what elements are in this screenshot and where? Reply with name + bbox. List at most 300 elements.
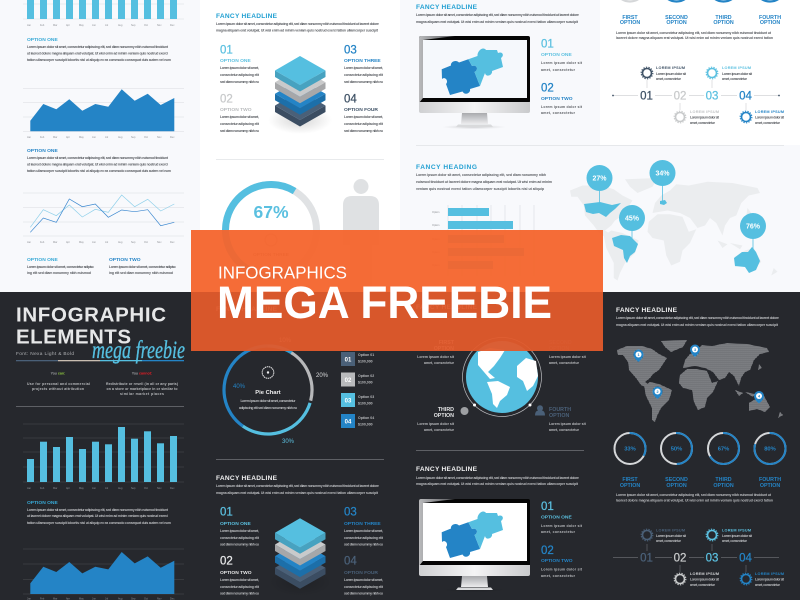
list item 01 [220,506,260,546]
list item 04: sed diam nonummy nibh eu [344,592,383,596]
banner: orange overlay [191,230,603,351]
horizontal bar chart: Option [432,238,440,241]
icon: person [343,179,379,292]
text block: you can [27,372,90,391]
text block: circles description: Lorem ipsum dolor sit amet, consectetur adipiscing elit, sed diam nonummy nibh euismod tincidunt ut [616,31,772,35]
area chart: light: Jun [92,136,97,139]
heading: behind banner: FANCY HEADLINE [416,304,478,311]
text block: you cannot [106,372,178,396]
text block: line chart legend [27,257,176,275]
list item 03: sed diam nonummy nibh eu [344,80,383,84]
legend: 01: $100,000 [358,360,373,364]
text block: you cannot: similar market places [120,392,164,396]
text block: option one: OPTION ONE [27,37,58,43]
timeline: 01 to 04: Lorem ipsum dolor sit [755,116,785,120]
list item 04: Lorem ipsum dolor sit amet, [344,578,383,582]
bubble 27%: 27% [592,176,607,182]
bubble 45%: 45% [625,216,640,222]
icon: pie centre [262,367,274,378]
bar chart: dark: Sep [131,487,136,490]
legend: 03: Option 03 [358,395,374,399]
text block: rings description [616,493,773,502]
timeline: 01 to 04 dark: 02 [674,552,686,564]
bubble 76% [740,213,766,239]
panel: globe dark [416,304,587,432]
timeline: 01 to 04 dark: amet, consectetur [755,583,781,587]
area chart: light: Apr [66,136,70,139]
legend: 04: Option 04 [358,416,374,420]
text block: intro: magna aliquam erat volutpat. Ut wisi enim ad minim veniam quis nostrud exerci tation ullamcorper suscipit [216,28,379,32]
timeline: 01 to 04 dark: 04 [739,552,752,564]
horizontal bar chart [432,205,534,276]
text block: rings description: Lorem ipsum dolor sit amet, consectetur adipiscing elit, sed diam nonummy nibh euismod tincidunt ut [616,493,772,497]
bar chart: dark: May [79,487,84,490]
label: fourth option: amet, consectetur [549,428,580,432]
text block: pie chart: adipiscing elit sed diam nonummy nibh eu [239,406,297,410]
panel: dotted map and timeline dark [613,307,786,587]
text block: intro: Lorem ipsum dolor sit amet, consectetur adipiscing elit, sed diam nonummy nibh euismod tincidunt ut laoreet dolore [416,476,579,480]
bar chart: dark: Dec [170,487,175,490]
panel: dark charts column [23,424,184,600]
bar chart: dark: Aug [118,487,123,490]
panel: timeline light [612,0,786,125]
heading: fancy headline: FANCY HEADLINE [216,13,278,20]
list item 01: OPTION ONE [220,58,251,64]
text block: you can: projects without attribution [32,387,84,391]
icon: globe [462,338,542,416]
list item 04: 04 [344,94,357,106]
list item 04 [344,94,384,133]
list item 01: 01 [220,44,233,56]
label: first option: FIRST [439,340,455,346]
area chart: light: Dec [170,136,175,139]
label: first option: Lorem ipsum dolor sit [417,355,455,359]
legend: 04 [341,414,374,428]
legend: 03: 03 [345,398,352,404]
list item 01: OPTION ONE [541,514,572,520]
timeline: 01 to 04 dark: Lorem ipsum dolor sit [755,578,785,582]
timeline: 01 to 04 dark: Lorem ipsum dolor sit [722,534,753,538]
text block: circles description: laoreet dolore magna aliquam erat volutpat. Ut wisi enim ad minim veniam quis nostrud exerci tation [616,36,773,40]
timeline: 01 to 04: 02 [674,90,686,102]
list item 03: OPTION THREE [344,521,381,527]
bar chart: dark: Apr [66,487,70,490]
text block: you cannot: on a store or marketplace in or similar to [106,387,178,391]
line chart: two series: Sep [131,241,136,244]
line chart: two series [23,193,184,244]
legend: 01 [341,352,374,366]
icon: stacked layers [268,56,332,134]
pie labels: 10% [279,338,292,344]
labels: four options: SECOND [665,477,688,483]
timeline: 01 to 04 dark: amet, consectetur [690,583,716,587]
timeline: 01 to 04 [612,66,785,125]
label: second option: OPTION [549,346,569,352]
list item 04 [344,556,384,596]
timeline: 01 to 04 dark: amet, consectetur [656,539,682,543]
subtitle: font note: Font: Nexa Light & Bold [16,351,74,357]
text block: intro: magna aliquam erat volutpat. Ut wisi enim ad minim veniam quis nostrud exerci tation ullamcorper suscipit [416,482,579,486]
list item 03: OPTION THREE [344,58,381,64]
labels: four options: OPTION [713,483,734,489]
list item 02: 02 [220,556,233,568]
pie ring [207,329,329,451]
bubble 34% [650,160,676,186]
list item 01: Lorem ipsum dolor sit amet, [220,66,259,70]
script: mega freebie: mega freebie [92,337,185,364]
label: third option: Lorem ipsum dolor sit [417,422,455,426]
text block: intro [416,173,552,191]
label: fourth option: Lorem ipsum dolor sit [549,422,587,426]
list item 01: Lorem ipsum dolor sit [541,61,583,65]
text block: intro: Lorem ipsum dolor sit amet, consectetur adipiscing elit, sed diam nonummy nibh euismod tincidunt ut laoreet dolore [216,484,379,488]
text block: option one blue [27,148,171,173]
text block: intro [216,484,379,495]
label: fourth option: OPTION [549,413,569,419]
labels: four options: THIRD [715,477,732,483]
label: third option: amet, consectetur [424,428,455,432]
bar chart: cropped light: Feb [40,24,45,27]
panel: stacked layers dark [216,475,384,596]
text block: option one dark: OPTION ONE [27,500,58,506]
list item 01 [220,44,260,84]
text block: option one: tation ullamcorper suscipit lobortis nisl ut aliquip ex ea commodo consequat duis autem vel eum [27,58,171,62]
label: second option: SECOND [549,340,572,346]
horizontal bar chart: Option [432,264,440,267]
list item 02: consectetur adipiscing elit [220,122,260,126]
list item 02: OPTION TWO [541,558,573,564]
timeline: 01 to 04: Lorem ipsum dolor sit [656,72,687,76]
list item 02: OPTION TWO [220,570,252,576]
bar chart: dark: Jul [105,487,109,490]
text block: line chart legend: ing elit sed diam nonummy nibh euismod [27,271,91,275]
list item 01: amet, consectetur [541,530,576,534]
list item 02: amet, consectetur [541,111,576,115]
list item 01: Lorem ipsum dolor sit [541,524,583,528]
list item 02: Lorem ipsum dolor sit [541,105,583,109]
line chart: two series: May [79,241,84,244]
progress ring 50%: 50% [671,446,682,452]
text block: pie chart: Lorem ipsum dolor sit amet, consectetur [240,399,296,403]
line chart: two series: Aug [118,241,123,244]
labels: four options: SECOND [665,15,688,21]
area chart: light: Mar [53,136,57,139]
labels: four options: OPTION [666,483,687,489]
bar chart: cropped light: Jun [92,24,97,27]
list item 03 [344,44,384,84]
legend: 01: Option 01 [358,353,374,357]
line chart: two series: Oct [144,241,148,244]
map pin 2 [652,386,662,399]
text block: intro: Lorem ipsum dolor sit amet, consectetur adipiscing elit, sed diam nonummy nibh euismod tincidunt ut laoreet dolore [416,13,579,17]
text block: intro: magna aliquam erat volutpat. Ut wisi enim ad minim veniam quis nostrud exerci tation ullamcorper suscipit [216,491,379,495]
heading: fancy headline: FANCY HEADLINE [416,4,478,11]
labels: four options: OPTION [620,483,640,489]
text block: intro: Lorem ipsum dolor sit amet, consectetur adipiscing elit, sed diam nonummy nibh euismod tincidunt ut laoreet dolore [216,22,379,26]
bar chart: dark: Oct [144,487,148,490]
bar chart: dark [23,424,184,490]
list item 04: sed diam nonummy nibh eu [344,129,383,133]
text block: you can: You can: [51,372,65,376]
progress ring 50% [661,433,692,464]
area chart: dark [23,549,184,600]
bubble 45% [619,205,645,231]
list item 01: amet, consectetur [541,68,576,72]
horizontal bar chart: Option [432,211,440,214]
icon: stacked layers dark [268,518,332,596]
title: infographic elements: INFOGRAPHIC [16,304,166,326]
timeline: 01 to 04 dark: LOREM IPSUM [690,572,719,576]
list item 01: 01 [541,38,554,50]
timeline: 01 to 04 dark: Lorem ipsum dolor sit [690,578,720,582]
text block: option one dark [27,500,171,525]
timeline: 01 to 04: 04 [739,90,752,102]
text block: pie chart: Pie Chart [255,390,281,396]
list item 04: Lorem ipsum dolor sit amet, [344,115,383,119]
text block: option one blue: tation ullamcorper suscipit lobortis nisl ut aliquip ex ea commodo consequat duis autem vel eum [27,169,171,173]
timeline: 01 to 04: 03 [706,90,718,102]
legend: 03: $100,000 [358,402,373,406]
list item 04: consectetur adipiscing elit [344,585,384,589]
heading: fancy headline: FANCY HEADLINE [616,307,678,314]
map pin 1: 1 [637,353,640,357]
label: second option: Lorem ipsum dolor sit [549,355,587,359]
label: fourth option: FOURTH [549,407,571,413]
label: first option: amet, consectetur [424,361,455,365]
text block: intro: veniam quis nostrud exerci tation ullamcorper suscipit lobortis nisl ut aliquip [416,187,544,191]
text block: intro [416,476,579,486]
text block: option one: ut laoreet dolore magna aliquam erat volutpat. Ut wisi enim ad minim veniam quis nostrud exerci [27,52,168,56]
bar chart: cropped light: Jan [27,24,32,27]
bubble 27% [586,165,612,191]
background: white column [200,0,400,292]
donut chart: 67% [209,168,333,292]
labels: four options: FIRST [622,477,638,483]
text block: option one blue: ut laoreet dolore magna aliquam erat volutpat. Ut wisi enim ad minim veniam quis nostrud exerci [27,162,168,166]
text block: option one blue: OPTION ONE [27,148,58,154]
title: infographic elements [16,304,166,348]
legend: 02: Option 02 [358,374,374,378]
pie labels: 20% [316,373,329,379]
text block: option one dark: Lorem ipsum dolor sit amet, consectetur adipiscing elit, sed diam nonummy nibh euismod tincidunt [27,508,169,512]
legend: 04: $100,000 [358,422,373,426]
text block: intro [216,22,379,32]
area chart: light: Sep [131,136,136,139]
label: third option: THIRD [438,407,454,413]
panel: bar chart and world map light [416,160,778,280]
heading: fancy headline: FANCY HEADLINE [216,475,278,482]
list item 02 [220,94,260,133]
list item 01 [541,38,583,72]
list item 03: consectetur adipiscing elit [344,536,384,540]
list item 03: sed diam nonummy nibh eu [344,542,383,546]
donut chart: 67%: 67% [253,202,289,222]
timeline: 01 to 04 dark: LOREM IPSUM [755,572,784,576]
line chart: two series: Dec [170,241,175,244]
pie labels: 40% [233,384,246,390]
bubble 34%: 34% [655,170,670,178]
line chart: two series: Jul [105,241,109,244]
line chart: two series: Nov [157,241,162,244]
line chart: two series: Mar [53,241,57,244]
timeline: 01 to 04: amet, consectetur [656,77,682,81]
list item 01: consectetur adipiscing elit [220,536,260,540]
legend: 04: 04 [345,420,352,426]
list item 02: amet, consectetur [541,574,576,578]
progress ring 80% [754,433,786,464]
list item 02: Lorem ipsum dolor sit amet, [220,115,259,119]
labels: four options: FOURTH [759,15,781,21]
text block: option one: Lorem ipsum dolor sit amet, consectetur adipiscing elit, sed diam nonummy nibh euismod tincidunt [27,45,169,49]
timeline: 01 to 04 dark: 03 [706,552,718,564]
list item 02: Lorem ipsum dolor sit [541,568,583,572]
list item 02 [541,82,583,115]
list item 04: consectetur adipiscing elit [344,122,384,126]
heading: fancy heading: FANCY HEADING [416,164,477,171]
donut chart: 67%: OPTION THREE [253,252,290,258]
bar chart: dark: Mar [53,487,57,490]
label: first option [417,340,455,365]
legend: 01: 01 [345,358,352,364]
legend: 02: 02 [345,378,352,384]
text block: line chart legend: OPTION TWO [109,257,141,263]
list item 04: OPTION FOUR [344,570,378,576]
panel: monitor light [416,4,583,129]
bar chart: cropped light: Apr [66,24,70,27]
label: second option [549,340,587,365]
text block: intro [616,316,779,327]
bar chart: cropped light: Nov [157,24,162,27]
timeline: 01 to 04 dark: 01 [640,552,653,564]
text block: rings description: laoreet dolore magna aliquam erat volutpat. Ut wisi enim ad minim veniam quis nostrud exerci tation [616,498,773,502]
area chart: light: Oct [144,136,148,139]
map pin 4: 4 [758,394,761,398]
timeline: 01 to 04: Lorem ipsum dolor sit [722,72,753,76]
list item 02: 02 [541,545,554,557]
timeline: 01 to 04: amet, consectetur [722,77,748,81]
list item 02: OPTION TWO [220,107,252,113]
bar chart: cropped light: Aug [118,24,123,27]
list item 02: sed diam nonummy nibh eu [220,592,259,596]
banner line: mega freebie: MEGA FREEBIE [217,277,552,328]
list item 01: Lorem ipsum dolor sit amet, [220,529,259,533]
area chart: light: Feb [40,136,45,139]
map pin 4 [754,391,764,404]
background: light top half [0,0,800,292]
legend: 02: $100,000 [358,380,373,384]
progress ring 33%: 33% [624,446,636,452]
legend: 02 [341,372,374,386]
list item 02: sed diam nonummy nibh eu [220,129,259,133]
world map with highlights [570,178,778,280]
bar chart: cropped light [23,0,184,27]
timeline: 01 to 04 dark: LOREM IPSUM [656,528,685,532]
background: dark bottom half [0,292,800,600]
bar chart: cropped light: Mar [53,24,57,27]
text block: intro: magna aliquam erat volutpat. Ut wisi enim ad minim veniam quis nostrud exerci tation ullamcorper suscipit [616,323,779,327]
list item 01: consectetur adipiscing elit [220,73,260,77]
panel: title block dark [16,304,185,407]
label: fourth option [535,405,587,432]
pie labels: 30% [282,439,295,445]
bar chart: cropped light: Dec [170,24,175,27]
list item 02: OPTION TWO [541,96,573,102]
bar chart: dark: Nov [157,487,162,490]
heading: fancy headline behind banner: FANCY HEADLINE [216,306,278,313]
timeline: 01 to 04: LOREM IPSUM [722,66,751,70]
title: infographic elements: ELEMENTS [16,326,131,348]
text block: you cannot: You cannot: [132,372,152,376]
list item 01 [541,501,583,534]
legend: 03 [341,393,374,407]
line chart: two series: Jun [92,241,97,244]
background: white top right column [600,0,800,145]
horizontal bar chart: Option [432,224,440,227]
list item 02: consectetur adipiscing elit [220,585,260,589]
list item 03: Lorem ipsum dolor sit amet, [344,66,383,70]
timeline: 01 to 04: LOREM IPSUM [755,110,784,114]
labels: four options: OPTION [760,483,780,489]
labels: four options: THIRD [715,15,732,21]
labels: four options: OPTION [713,20,734,26]
bar chart: cropped light: Jul [105,24,109,27]
bar chart: dark: Jan [27,487,32,490]
timeline: 01 to 04 dark: amet, consectetur [722,539,748,543]
dotted world map [617,340,783,422]
banner line: infographics: INFOGRAPHICS [218,262,347,282]
list item 01: sed diam nonummy nibh eu [220,542,259,546]
labels: four options: FIRST [622,15,638,21]
timeline: 01 to 04: LOREM IPSUM [656,66,685,70]
list item 01: 01 [220,506,233,518]
heading: fancy headline: FANCY HEADLINE [416,466,478,473]
area chart: light [23,88,184,139]
text block: intro: magna aliquam erat volutpat. Ut wisi enim ad minim veniam quis nostrud exerci tation ullamcorper suscipit [416,20,579,24]
text block: line chart legend: ing elit sed diam nonummy nibh euismod [109,271,173,275]
map pin 1 [634,350,644,362]
area chart: light: Jul [105,136,109,139]
list item 01: 01 [541,501,554,513]
label: first option: OPTION [434,346,454,352]
progress ring 67% [708,433,739,464]
text block: intro: Lorem ipsum dolor sit amet, consectetur adipiscing elit, sed diam nonummy nibh euismod tincidunt ut laoreet dolore [616,316,779,320]
list item 03: 03 [344,44,357,56]
progress ring 80%: 80% [764,446,776,452]
text block: pie chart [239,390,297,410]
text block: intro: euismod tincidunt ut laoreet dolore magna aliquam erat volutpat. Ut wisi enim ad minim [416,180,552,184]
line chart: two series: Apr [66,241,70,244]
timeline: 01 to 04 dark: Lorem ipsum dolor sit [656,534,687,538]
panel: monitor dark [416,466,583,592]
timeline: 01 to 04: amet, consectetur [690,121,716,125]
text block: line chart legend: Lorem ipsum dolor sit amet, consectetur adipisc [27,265,94,269]
list item 04: OPTION FOUR [344,107,378,113]
panel: stacked layers light [209,13,384,292]
timeline: 01 to 04: 01 [640,90,653,102]
list item 02: 02 [220,94,233,106]
list item 02 [541,545,583,578]
text block: option one [27,37,171,62]
labels: four options: FOURTH [759,477,781,483]
area chart: light: Jan [27,136,32,139]
text block: you cannot: Redistribute or resell (in all or any parts) [106,382,178,386]
progress ring 67%: 67% [718,446,729,452]
bubble 76%: 76% [746,224,761,230]
bar chart: dark: Feb [40,487,45,490]
labels: four options: OPTION [666,20,687,26]
list item 01: sed diam nonummy nibh eu [220,80,259,84]
horizontal bar chart: Option [432,251,440,254]
